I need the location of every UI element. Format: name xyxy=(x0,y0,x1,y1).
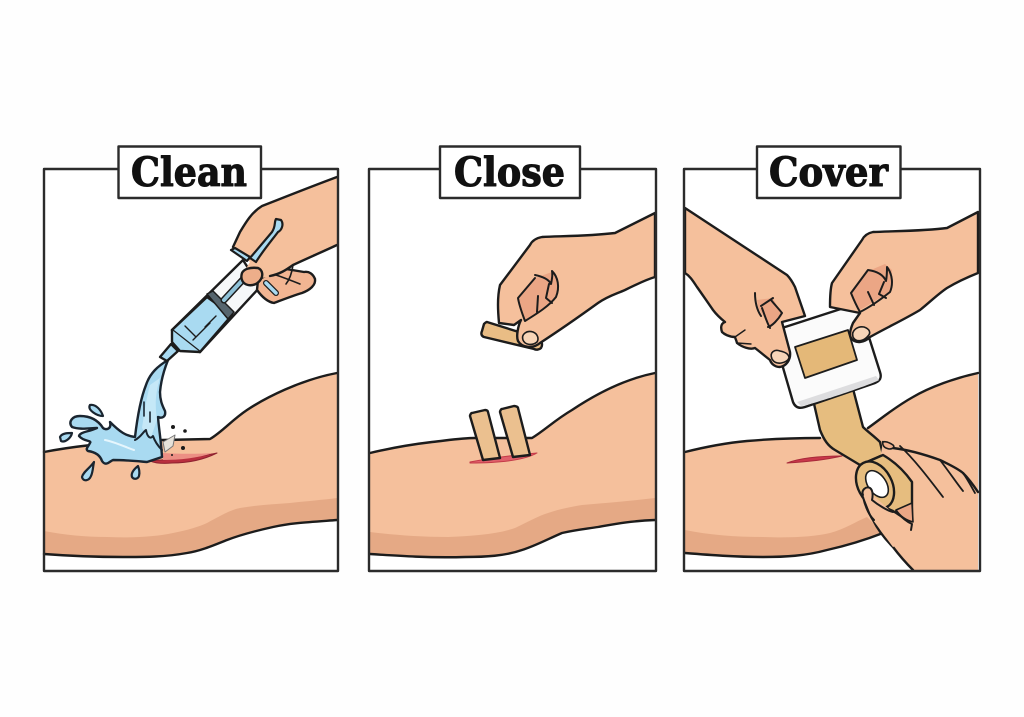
bandage strip xyxy=(812,385,883,465)
heading: Cover: Cover xyxy=(769,149,889,196)
lower fingers xyxy=(257,268,315,303)
water stream and splash xyxy=(60,360,187,480)
right hand xyxy=(830,212,978,342)
plunger and flange xyxy=(231,219,282,262)
hand holding strip xyxy=(498,213,655,347)
arm with wound xyxy=(44,373,337,557)
held strip xyxy=(481,322,542,350)
thumb xyxy=(241,268,262,285)
left hand xyxy=(685,208,805,367)
wound closure strips xyxy=(470,406,530,460)
syringe xyxy=(160,260,260,361)
water drops xyxy=(60,405,139,480)
hand holding syringe xyxy=(231,177,337,303)
heading: Clean: Clean xyxy=(131,149,247,196)
back of hand xyxy=(233,177,337,278)
hand with tape roll xyxy=(848,442,978,570)
tape roll xyxy=(848,455,913,522)
heading: Close: Close xyxy=(454,149,565,196)
gauze pad xyxy=(775,305,881,408)
arm with wound and strips xyxy=(370,373,655,557)
panel: close xyxy=(369,146,656,571)
arm with wound xyxy=(685,373,978,570)
panel: cover xyxy=(684,146,980,571)
panel: clean xyxy=(44,146,338,571)
